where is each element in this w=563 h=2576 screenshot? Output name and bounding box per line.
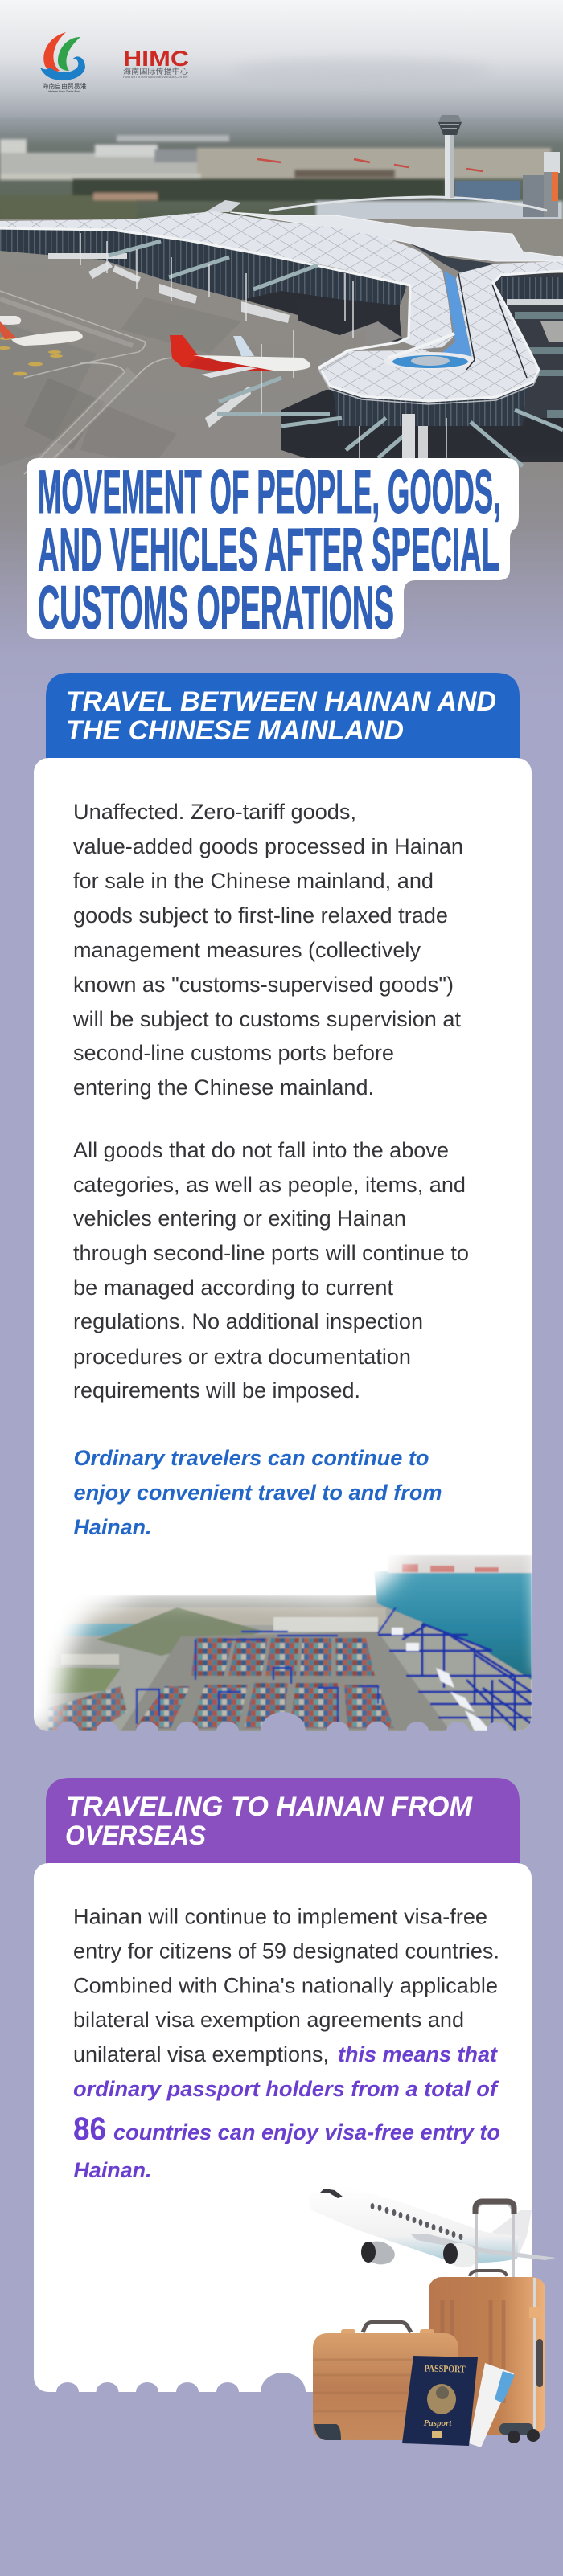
- jet bridges and poles: [48, 233, 563, 468]
- illustration: passport: Pasport: [424, 2418, 452, 2428]
- logo: HIMC: Hainan International Media Center: [123, 75, 189, 79]
- paragraph 2: requirements will be imposed.: [73, 1378, 360, 1403]
- paragraph 2: regulations. No additional inspection: [73, 1309, 423, 1333]
- section heading bar: [46, 1778, 520, 1881]
- section heading bar: OVERSEAS: [65, 1820, 206, 1851]
- panel: travel between Hainan and the Chinese mainland: [34, 673, 532, 1731]
- illustration: passport: PASSPORT: [424, 2363, 466, 2374]
- parked aircraft: [0, 316, 310, 378]
- port photo: [34, 1554, 532, 1731]
- logo: Hainan Free Trade Port: [40, 32, 87, 93]
- dark service roads: [243, 262, 400, 318]
- paragraph 2: [73, 1138, 469, 1403]
- body paragraph: Combined with China's nationally applicable: [73, 1974, 498, 1998]
- paragraph 2: be managed according to current: [73, 1276, 393, 1300]
- back wing of terminal: [230, 212, 563, 261]
- terminal roof: [0, 211, 563, 404]
- logo: Hainan Free Trade Port: Hainan Free Trade Port: [48, 90, 80, 93]
- hero photo: airport terminal: [0, 0, 563, 707]
- paragraph 2: through second-line ports will continue to: [73, 1241, 469, 1265]
- highlighted conclusion: [74, 1446, 442, 1539]
- fade into page colour: [0, 493, 563, 707]
- glass curtain wall: [0, 227, 408, 305]
- paragraph 1: [72, 800, 463, 1100]
- paragraph 1: Unaffected. Zero-tariff goods,: [73, 800, 356, 824]
- logo: Hainan Free Trade Port: 海南自由贸易港: [42, 82, 87, 90]
- paragraph 2: All goods that do not fall into the above: [73, 1138, 449, 1162]
- paragraph 2: categories, as well as people, items, and: [73, 1173, 466, 1197]
- body paragraph: Hainan will continue to implement visa-free: [73, 1905, 487, 1929]
- section heading bar: [46, 673, 520, 772]
- body paragraph: unilateral visa exemptions,: [73, 2042, 329, 2066]
- body paragraph: 86: [73, 2111, 106, 2147]
- paragraph 1: will be subject to customs supervision at: [72, 1007, 461, 1031]
- scalloped card edge: [56, 1712, 509, 1751]
- section heading bar: TRAVELING TO HAINAN FROM: [66, 1792, 473, 1822]
- paragraph 1: management measures (collectively: [73, 938, 421, 962]
- body paragraph: Hainan.: [74, 2158, 151, 2182]
- illustration: short suitcase: [313, 2322, 458, 2440]
- body paragraph: countries can enjoy visa-free entry to: [113, 2120, 500, 2144]
- paragraph 2: procedures or extra documentation: [73, 1345, 411, 1369]
- paragraph 1: goods subject to first-line relaxed trade: [73, 903, 448, 928]
- illustration: passport: [402, 2356, 478, 2446]
- panel: traveling to Hainan from overseas: [34, 1778, 532, 2411]
- white card: [34, 1863, 532, 2392]
- body paragraph: entry for citizens of 59 designated countries.: [73, 1939, 499, 1963]
- body paragraph: this means that: [338, 2042, 498, 2066]
- paragraph 1: entering the Chinese mainland.: [73, 1075, 374, 1100]
- paragraph 1: for sale in the Chinese mainland, and: [73, 869, 434, 893]
- highlighted conclusion: enjoy convenient travel to and from: [74, 1480, 442, 1505]
- section heading bar: THE CHINESE MAINLAND: [66, 715, 404, 746]
- illustration: boarding pass: [469, 2363, 515, 2447]
- control tower: [438, 115, 462, 198]
- highlighted conclusion: Ordinary travelers can continue to: [74, 1446, 429, 1470]
- white card: [34, 758, 532, 1731]
- body paragraph: [73, 1905, 500, 2182]
- highlighted conclusion: Hainan.: [74, 1515, 151, 1539]
- apron: [0, 219, 563, 645]
- logo: HIMC: 海南国际传播中心: [123, 67, 189, 76]
- scalloped card edge: [56, 2373, 306, 2411]
- paragraph 2: vehicles entering or exiting Hainan: [73, 1206, 406, 1231]
- section heading bar: TRAVEL BETWEEN HAINAN AND: [66, 686, 496, 717]
- paragraph 1: value-added goods processed in Hainan: [73, 834, 463, 858]
- illustration: airplane: [309, 2186, 556, 2271]
- body paragraph: ordinary passport holders from a total of: [73, 2077, 499, 2101]
- illustration: tall suitcase: [429, 2201, 545, 2443]
- logo: HIMC: [123, 47, 189, 79]
- body paragraph: bilateral visa exemption agreements and: [73, 2008, 464, 2032]
- paragraph 1: known as "customs-supervised goods"): [73, 973, 454, 997]
- logo: HIMC: HIMC: [123, 47, 189, 71]
- title sticker: [27, 458, 519, 642]
- paragraph 1: second-line customs ports before: [73, 1041, 394, 1065]
